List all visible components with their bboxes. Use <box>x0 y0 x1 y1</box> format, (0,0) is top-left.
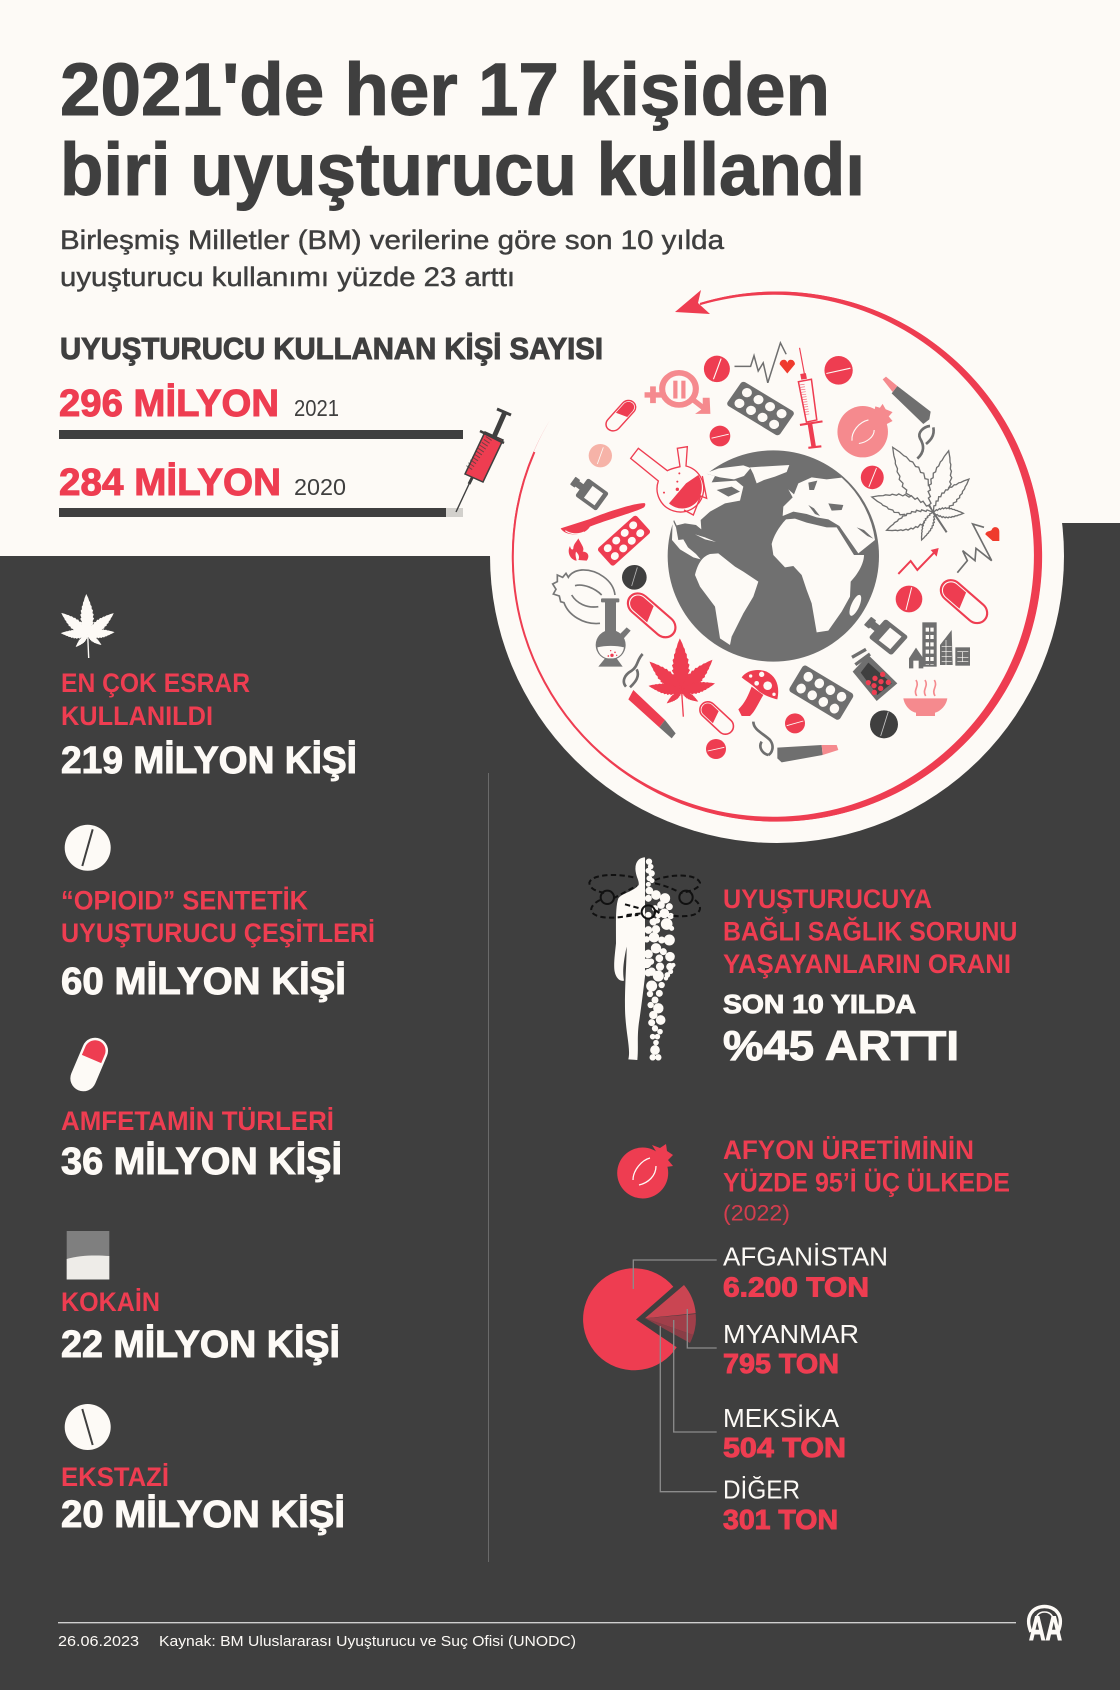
heading: number of users: UYUŞTURUCU KULLANAN KİŞİ SAYISI <box>60 331 603 366</box>
legend: Afghanistan: 6.200 TON <box>723 1272 869 1302</box>
label: AFYON ÜRETİMİNİN <box>723 1135 974 1165</box>
panel: cocaine <box>61 1231 340 1366</box>
logo: AA: AA <box>1029 1610 1062 1648</box>
icon: bong <box>596 598 631 667</box>
icon: large capsule <box>936 576 992 628</box>
background: dark lower panel <box>0 523 1120 1690</box>
legend: Mexico: 504 TON <box>723 1432 846 1463</box>
footer: date and source: 26.06.2023 <box>58 1633 139 1650</box>
icon: white cannabis leaf <box>58 594 117 658</box>
icon: smoke <box>624 654 643 687</box>
icon: pill bottle with red dots <box>852 649 897 701</box>
icon: dark pill <box>622 565 647 590</box>
bar 2021 <box>59 430 463 439</box>
icon: cocaine bag <box>67 1231 109 1280</box>
label: EKSTAZİ <box>61 1462 169 1492</box>
footer rule <box>58 1622 1016 1624</box>
icon: chemistry flask <box>631 447 707 515</box>
value: SON 10 YILDA <box>723 989 916 1019</box>
year note: (2022) <box>723 1200 790 1226</box>
icon: large capsule <box>624 589 680 642</box>
label: “OPIOID” SENTETİK <box>61 886 308 916</box>
panel: amphetamines <box>61 1034 342 1183</box>
icon cluster: left of the globe <box>553 444 707 667</box>
icon: steaming bowl <box>903 680 947 716</box>
subtitle <box>60 225 725 292</box>
title <box>60 48 865 211</box>
icon: city skyline <box>909 622 970 669</box>
icon: pale pill <box>589 444 612 467</box>
panel: cannabis <box>58 594 357 782</box>
label: YAŞAYANLARIN ORANI <box>723 949 1011 979</box>
label: KOKAİN <box>61 1287 160 1317</box>
icon cluster: below the globe <box>624 638 947 762</box>
icon: cigarette <box>883 377 931 424</box>
icon: outline cannabis leaf <box>869 440 975 542</box>
value: %45 ARTTI <box>723 1022 959 1069</box>
label: EN ÇOK ESRAR <box>61 668 250 698</box>
icon: small red pill <box>861 466 884 489</box>
icon: rising arrow <box>898 548 939 574</box>
center divider <box>488 773 490 1562</box>
value <box>723 989 959 1069</box>
bar chart: users 2021 vs 2020 <box>59 383 463 517</box>
logo: AA <box>1029 1606 1062 1648</box>
icon: red cannabis leaf <box>644 638 718 717</box>
value: 20 MİLYON KİŞİ <box>61 1494 345 1536</box>
label: KULLANILDI <box>61 701 213 731</box>
icon: flame <box>569 538 588 561</box>
icon: small red pills <box>706 713 805 759</box>
footer: date and source: Kaynak: BM Uluslararası Uyuşturucu ve Suç Ofisi (UNODC) <box>159 1633 576 1650</box>
icon: red poppy <box>617 1144 673 1198</box>
panel: opium production <box>583 1135 1010 1535</box>
icon: red cigarette <box>628 690 676 738</box>
icon: red pill <box>704 356 730 382</box>
value: 22 MİLYON KİŞİ <box>61 1324 340 1366</box>
value: 36 MİLYON KİŞİ <box>61 1141 342 1183</box>
label <box>61 668 250 731</box>
icon: salmon poppy <box>837 404 893 457</box>
icon: smoke <box>753 722 773 755</box>
label: UYUŞTURUCUYA <box>723 884 932 914</box>
legend: Other <box>723 1474 838 1535</box>
icon cluster: right of the globe <box>869 377 999 669</box>
legend: Mexico <box>723 1403 846 1463</box>
icon: small capsule <box>603 398 639 434</box>
legend: Mexico: MEKSİKA <box>723 1403 840 1433</box>
pie chart <box>583 1268 696 1370</box>
year 2020: 2020 <box>294 474 346 500</box>
label <box>723 1135 1010 1198</box>
icon: mushroom <box>738 670 778 716</box>
label: AMFETAMİN TÜRLERİ <box>61 1106 334 1136</box>
label: BAĞLI SAĞLIK SORUNU <box>723 916 1018 946</box>
icon: gray bottle <box>566 472 609 511</box>
year 2021: 2021 <box>294 395 339 421</box>
legend: Afghanistan: AFGANİSTAN <box>723 1242 888 1272</box>
drugs circle: cream disc <box>490 269 1064 843</box>
label <box>61 886 375 948</box>
legend: Other: DİĞER <box>723 1474 800 1504</box>
subtitle: Birleşmiş Milletler (BM) verilerine göre son 10 yılda <box>60 225 725 255</box>
label <box>723 884 1018 979</box>
legend: Afghanistan <box>723 1242 888 1302</box>
icon: dark pill <box>870 710 898 738</box>
icon: smoke <box>917 426 934 459</box>
icon: capsule <box>66 1034 112 1095</box>
icon: globe <box>667 450 879 662</box>
icon: heartbeat line with heart <box>734 343 795 383</box>
title: 2021'de her 17 kişiden <box>60 48 830 131</box>
legend: Myanmar <box>723 1319 859 1379</box>
title: biri uyuşturucu kullandı <box>60 128 865 211</box>
label: UYUŞTURUCU ÇEŞİTLERİ <box>61 918 375 948</box>
icon: gray bottle <box>859 611 908 656</box>
icon cluster: top of the globe <box>603 343 908 656</box>
icon: heartbeat with heart <box>957 524 999 573</box>
value 2020: 284 MİLYON <box>59 462 281 504</box>
icon: small red pill <box>710 426 730 446</box>
value: 60 MİLYON KİŞİ <box>61 961 346 1003</box>
icon: gray cigarette <box>777 745 838 762</box>
icon: small capsule <box>697 699 737 737</box>
label: YÜZDE 95’İ ÜÇ ÜLKEDE <box>723 1168 1010 1198</box>
circular red arrow <box>512 290 1042 822</box>
icon: syringe over bars <box>456 409 511 512</box>
value: 219 MİLYON KİŞİ <box>61 740 357 782</box>
icon: gray blister large <box>788 664 855 721</box>
subtitle: uyuşturucu kullanımı yüzde 23 arttı <box>60 262 515 292</box>
value 2021: 296 MİLYON <box>59 383 279 425</box>
bar 2020 <box>59 508 463 517</box>
icon: spoon <box>561 503 645 534</box>
icon: red pill <box>824 356 853 385</box>
icon: white pill <box>65 825 111 871</box>
icon: gray blister <box>726 381 795 436</box>
legend: Other: 301 TON <box>723 1504 838 1535</box>
icon: white pill <box>65 1404 111 1450</box>
icon: outline poppy <box>553 570 615 624</box>
icon: vertical syringe <box>798 348 823 448</box>
legend: Myanmar: 795 TON <box>723 1348 839 1379</box>
icon: gender symbol <box>645 373 710 414</box>
legend: Myanmar: MYANMAR <box>723 1319 859 1349</box>
icon: red pill <box>896 586 922 612</box>
icon: human body <box>589 857 700 1060</box>
panel: ecstasy <box>61 1404 345 1536</box>
panel: health problems <box>589 857 1018 1069</box>
icon: red blister <box>597 515 651 567</box>
leader lines <box>633 1260 717 1492</box>
panel: opioids <box>61 825 375 1003</box>
